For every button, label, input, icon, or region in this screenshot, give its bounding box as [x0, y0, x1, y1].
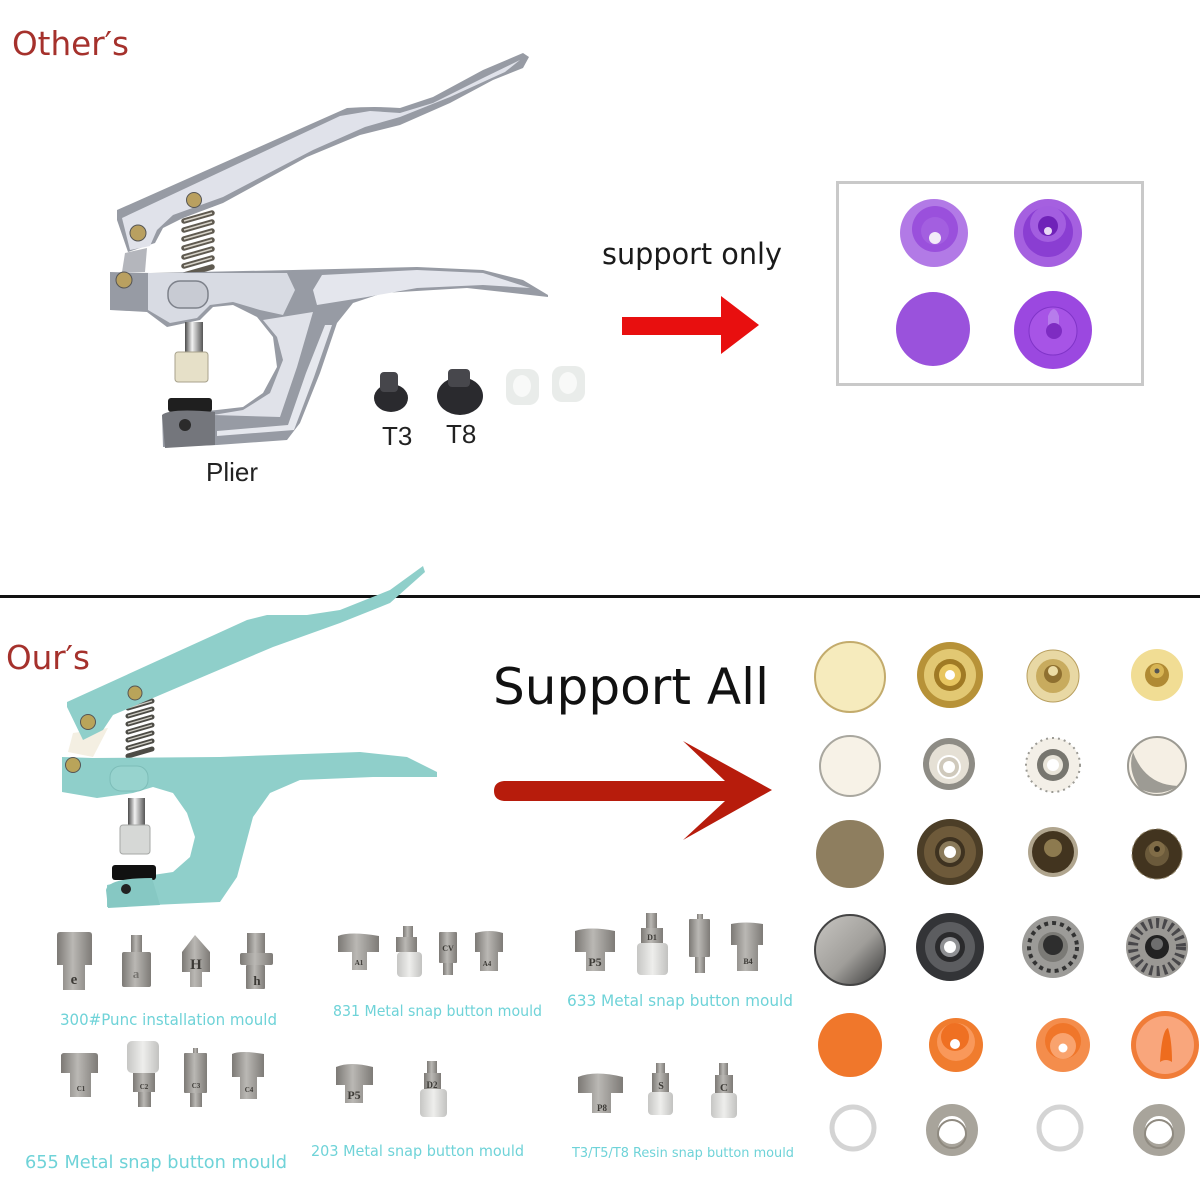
screws [128, 686, 142, 700]
purple stud cap back [1014, 199, 1082, 267]
icons: 300# mould set: e [71, 972, 78, 988]
purple stud [1014, 291, 1092, 369]
icons: 633 mould set: P5 [588, 955, 602, 969]
row: orange [818, 1011, 1199, 1079]
icons: 633 mould set: D1 [647, 933, 657, 942]
icon: silver plier [110, 53, 548, 448]
icons: 203 mould set: P5 [347, 1088, 361, 1102]
spring [184, 204, 212, 275]
row: eyelets [832, 1107, 1179, 1150]
icon: die T8 [437, 369, 483, 415]
row: gunmetal [815, 913, 1188, 985]
heading: Our's: Our′s [6, 638, 90, 677]
icons: 300# mould set: H [190, 957, 202, 973]
icon: teal plier [62, 566, 437, 908]
lower jaw [62, 752, 437, 907]
icons: 831 mould set: A1 [355, 959, 364, 967]
caption: 831: 831 Metal snap button mould [333, 1002, 542, 1020]
upper handle [117, 53, 529, 252]
screws [186, 192, 202, 208]
caption: 633: 633 Metal snap button mould [567, 991, 793, 1010]
arrow: red [622, 296, 759, 354]
linkage [122, 248, 147, 272]
icons: 831 mould set: CV [442, 944, 454, 953]
icons: 655 mould set: C3 [192, 1082, 201, 1090]
divider [0, 595, 1200, 598]
icons: 300# mould set: h [253, 973, 261, 988]
icons: T3/T5/T8 mould set: P8 [597, 1103, 607, 1113]
icons: 655 mould set [61, 1041, 264, 1107]
icons: 633 mould set: B4 [743, 957, 753, 966]
icons: 633 mould set [575, 913, 763, 975]
slot [168, 281, 208, 308]
anvil [112, 865, 156, 880]
row: gold [815, 642, 1183, 712]
text: support only: support only [602, 237, 782, 271]
heading: Other's: Other′s [12, 24, 129, 63]
icons: 203 mould set: D2 [426, 1080, 438, 1090]
caption: 655: 655 Metal snap button mould [25, 1152, 287, 1173]
icons: T3/T5/T8 mould set [578, 1063, 737, 1118]
caption: 203: 203 Metal snap button mould [311, 1142, 524, 1160]
linkage [68, 728, 108, 757]
caption: 300#Punc: 300#Punc installation mould [60, 1010, 277, 1029]
punch [185, 322, 203, 354]
icons: T3/T5/T8 mould set: C [720, 1082, 728, 1094]
panel: purple snap buttons [838, 182, 1142, 384]
slot [110, 766, 148, 791]
icons: 203 mould set [336, 1061, 447, 1117]
label: T8: T8 [446, 419, 476, 449]
icons: 831 mould set: A4 [483, 960, 492, 968]
icons: 655 mould set: C1 [77, 1085, 86, 1093]
icons: T3/T5/T8 mould set: S [658, 1081, 664, 1092]
icons: 655 mould set: C4 [245, 1086, 254, 1094]
spring [128, 701, 152, 756]
purple cap [896, 292, 970, 366]
icon: clear dies [506, 366, 585, 405]
icons: 300# mould set: a [133, 966, 140, 981]
icons: 655 mould set: C2 [140, 1083, 149, 1091]
label: T3: T3 [382, 421, 412, 451]
text: Support All: Support All [493, 658, 769, 716]
upper handle [67, 566, 425, 740]
icons: 300# mould set [57, 932, 273, 990]
label: Plier: Plier [206, 457, 258, 487]
caption: T3/T5/T8: T3/T5/T8 Resin snap button mould [571, 1145, 794, 1161]
icon: die T3 [374, 372, 408, 412]
anvil [168, 398, 212, 412]
row: nickel [820, 736, 1186, 796]
lower jaw [110, 267, 548, 447]
arrow: dark red [494, 741, 772, 840]
purple socket [900, 199, 968, 267]
row: bronze [816, 819, 1182, 888]
icons: 831 mould set [338, 926, 503, 977]
panel: snap button grid [815, 642, 1199, 1150]
punch [128, 798, 145, 828]
